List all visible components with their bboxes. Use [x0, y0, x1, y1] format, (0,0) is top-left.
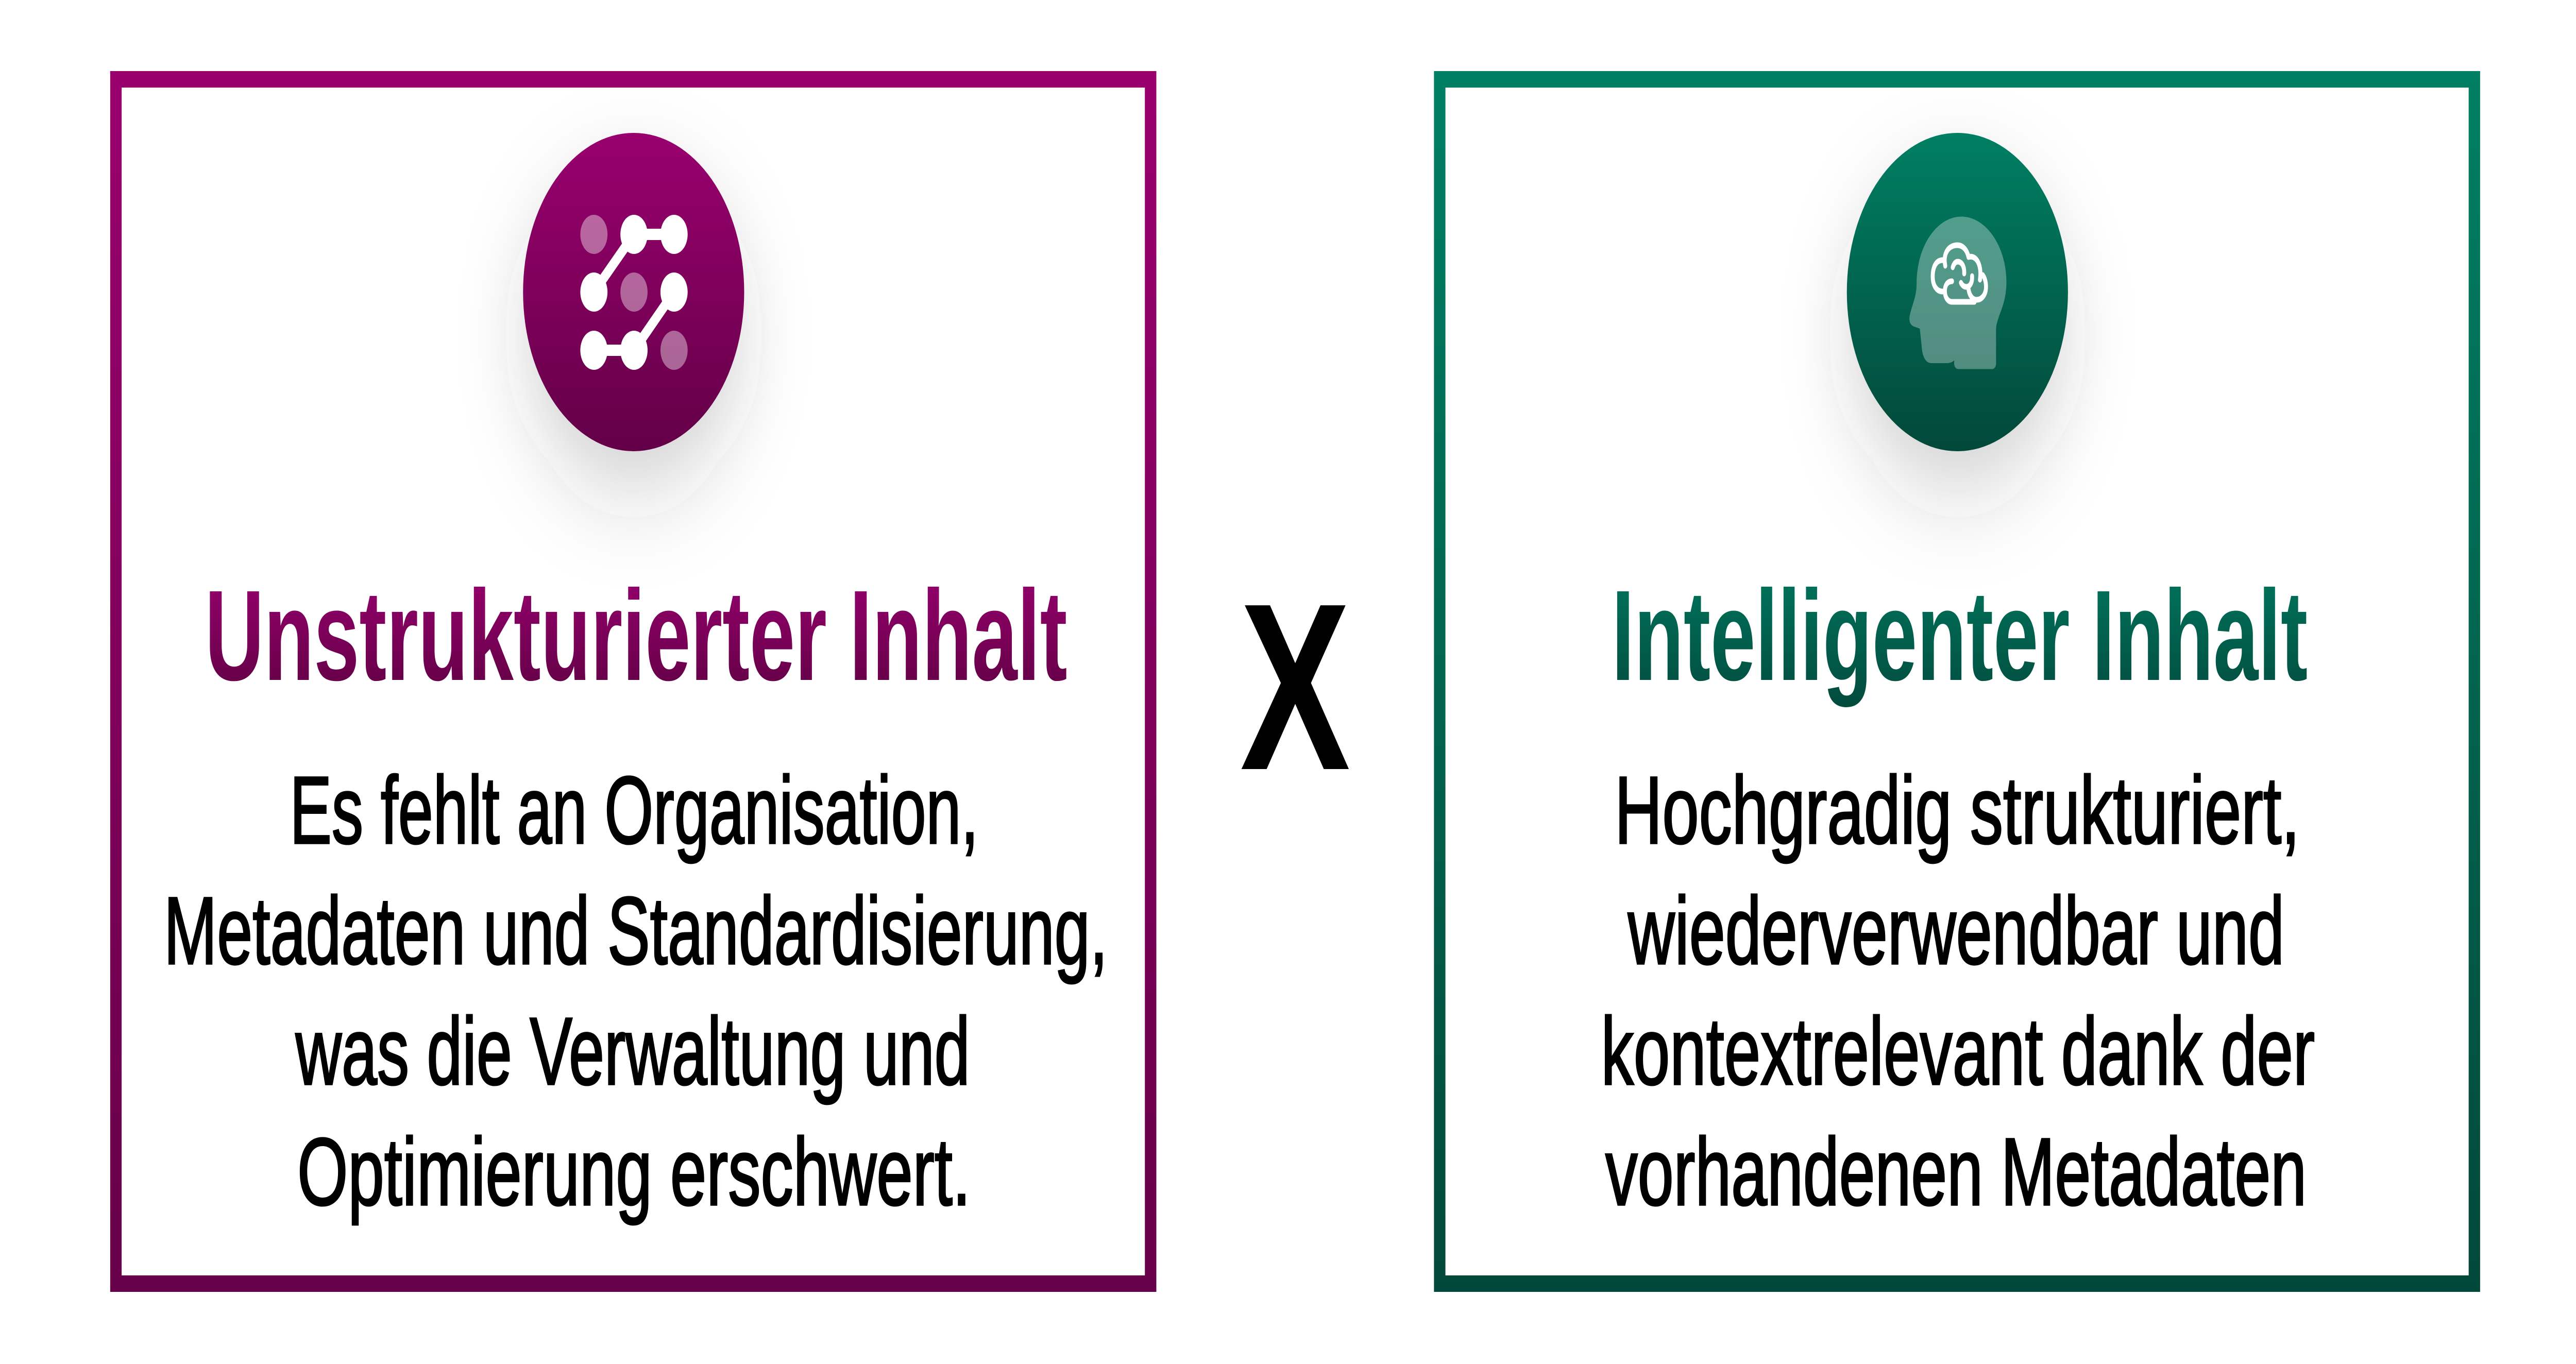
- text block: description: Metadaten und Standardisierung,: [164, 877, 1108, 984]
- panel border: green: [1439, 79, 2475, 1284]
- icon: dot grid with connected paths: [523, 133, 744, 451]
- text block: description: Es fehlt an Organisation,: [290, 757, 978, 863]
- text block: description: Optimierung erschwert.: [297, 1118, 971, 1225]
- icon shadow: green circle: [1850, 180, 2065, 489]
- text block: description: Hochgradig strukturiert,: [1615, 757, 2300, 863]
- connector: X between panels: X: [1240, 554, 1351, 820]
- panel: Intelligenter Inhalt: [1439, 79, 2475, 1284]
- text block: description: [1601, 757, 2315, 1225]
- panel: Unstrukturierter Inhalt: [116, 79, 1150, 1284]
- text block: description: wiederverwendbar und: [1628, 877, 2284, 984]
- heading: Unstrukturierter Inhalt: Unstrukturierter Inhalt: [205, 563, 1067, 707]
- icon: head with brain: [1847, 133, 2068, 451]
- text block: description: was die Verwaltung und: [295, 998, 970, 1104]
- text block: description: kontextrelevant dank der: [1601, 998, 2315, 1104]
- text block: description: vorhandenen Metadaten: [1605, 1118, 2307, 1225]
- heading: Intelligenter Inhalt: Intelligenter Inhalt: [1612, 563, 2308, 707]
- text block: description: [164, 757, 1108, 1225]
- icon shadow: magenta circle: [527, 180, 741, 489]
- panel border: magenta: [116, 79, 1150, 1284]
